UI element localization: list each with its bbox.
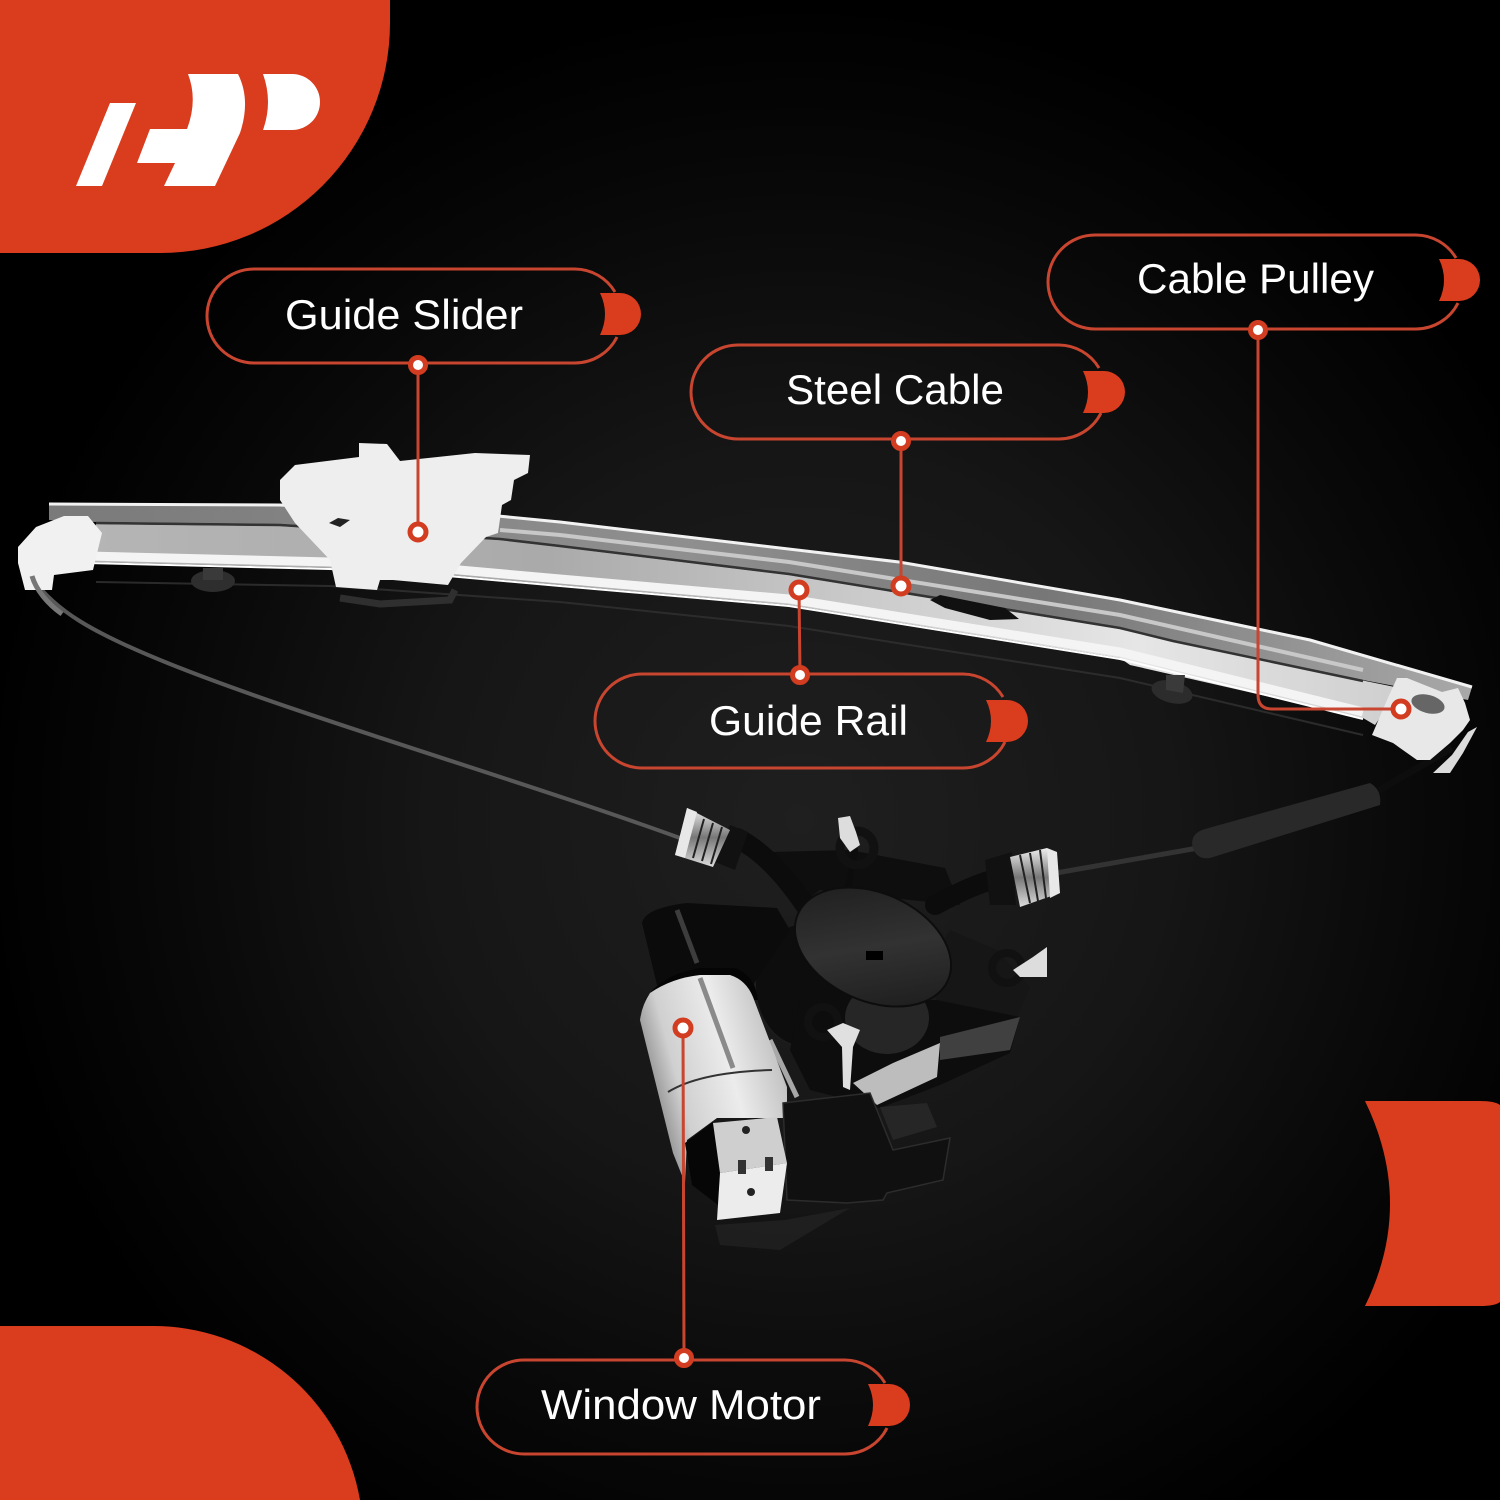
label: Steel Cable <box>691 345 1125 439</box>
mounting stud right <box>1149 675 1195 708</box>
edge shape: right <box>1365 1101 1500 1306</box>
motor collar <box>645 968 758 1000</box>
connector prong <box>880 1103 937 1140</box>
label: Guide Slider: Guide Slider <box>285 291 523 338</box>
logo <box>76 74 320 186</box>
rail top flange <box>49 504 1472 700</box>
motor can <box>640 975 787 1183</box>
window motor assembly <box>640 808 1060 1250</box>
cap highlight <box>677 910 697 963</box>
leader lines <box>418 330 1401 1358</box>
rail slot <box>930 595 1019 620</box>
dark gray housing strip <box>940 1017 1020 1060</box>
motor opening <box>685 1122 722 1205</box>
cable: right run <box>1056 748 1452 873</box>
motor top cap <box>642 903 790 985</box>
right arm plate <box>930 930 1030 1017</box>
motor shaft column <box>845 982 929 1054</box>
bracket plate <box>770 850 960 905</box>
label: Cable Pulley: Cable Pulley <box>1137 255 1374 302</box>
rail channel <box>88 524 1400 725</box>
label: Guide Slider <box>207 269 641 363</box>
label: Guide Rail: Guide Rail <box>709 697 908 744</box>
guide rail <box>49 504 1472 725</box>
left end cap <box>18 516 102 590</box>
cable pulley <box>1372 678 1477 773</box>
motor terminal <box>713 1117 787 1220</box>
side silver strip <box>770 1040 797 1097</box>
left spring <box>675 808 730 867</box>
corner shape: top left <box>0 0 390 253</box>
top plastic clip <box>838 816 874 865</box>
drum disk <box>776 864 970 1030</box>
lower housing <box>790 1000 1020 1108</box>
mounting stud left <box>191 568 235 592</box>
connector <box>783 1093 950 1203</box>
guide slider <box>280 443 530 590</box>
bracket arms <box>737 838 1000 905</box>
rail reflection <box>96 582 1363 735</box>
left spring collar <box>715 825 748 870</box>
cable: left run <box>32 578 680 838</box>
silver housing strip <box>853 1043 940 1105</box>
motor reflection <box>715 1208 850 1250</box>
right spring collar <box>985 852 1016 905</box>
cable sleeve <box>1192 783 1380 858</box>
label: Steel Cable: Steel Cable <box>786 366 1004 413</box>
lower plastic clip <box>808 1007 860 1090</box>
marker dots <box>410 322 1409 1366</box>
right plastic clip <box>992 947 1047 983</box>
label: Window Motor <box>477 1360 910 1454</box>
corner shape: bottom left <box>0 1326 360 1500</box>
housing drum <box>755 923 855 1047</box>
label: Cable Pulley <box>1048 235 1480 329</box>
right spring <box>1010 848 1060 907</box>
label: Guide Rail <box>595 674 1028 768</box>
label: Window Motor: Window Motor <box>541 1381 821 1428</box>
cable exit <box>32 576 62 614</box>
